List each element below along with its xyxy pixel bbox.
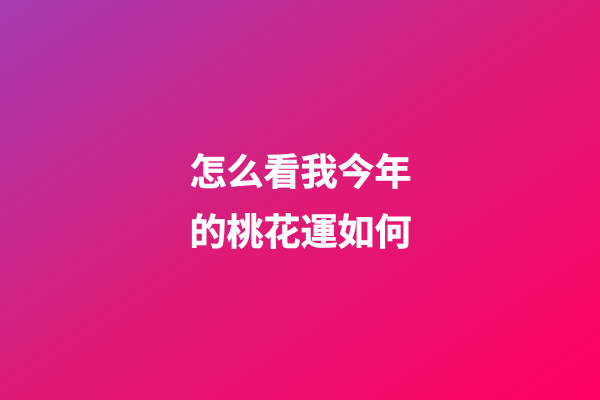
title (190, 152, 412, 252)
title: 的桃花運如何 (190, 212, 412, 252)
title: 怎么看我今年 (190, 152, 412, 193)
